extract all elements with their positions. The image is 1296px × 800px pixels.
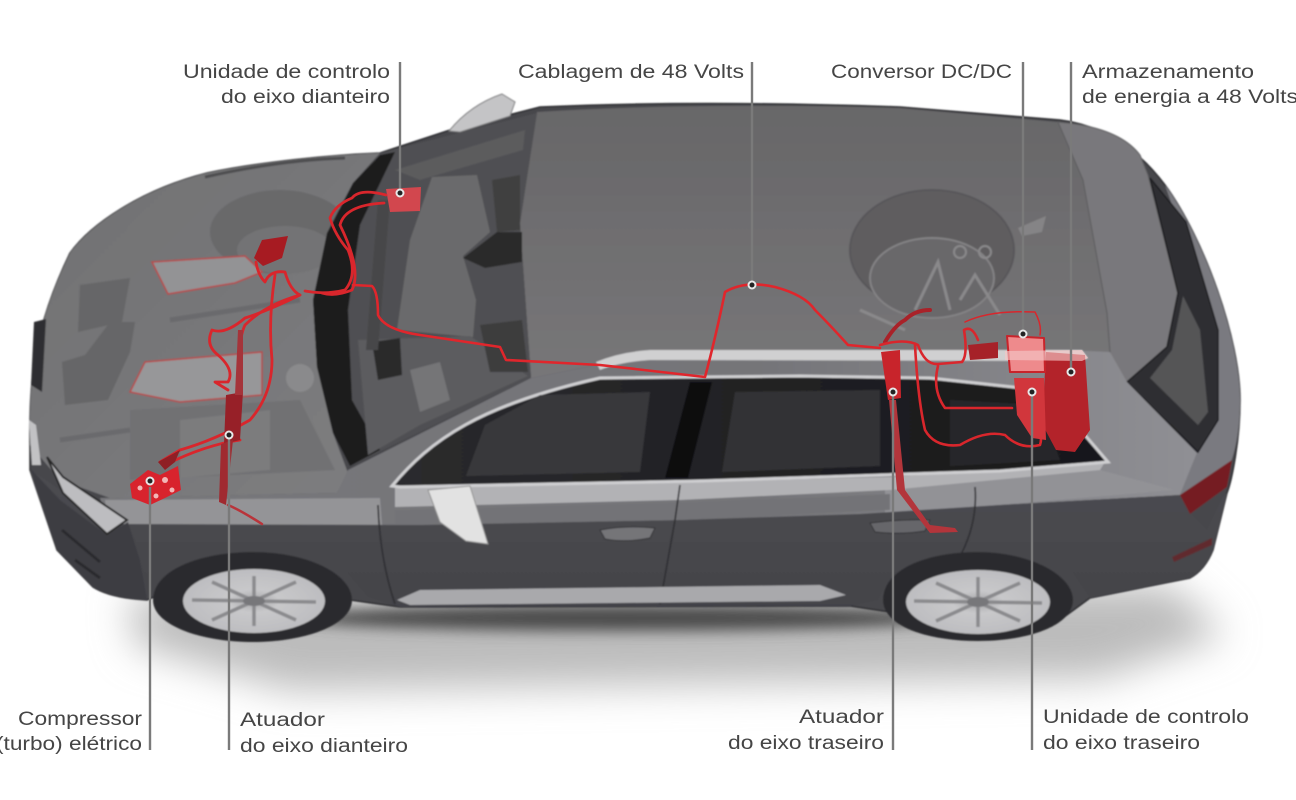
label: front axle actuator — [240, 710, 408, 757]
windshield with interior — [313, 113, 537, 466]
car illustration — [29, 94, 1240, 642]
sill trim — [397, 585, 846, 605]
side shoulder panel — [100, 351, 1197, 526]
front relay box — [254, 236, 288, 266]
main 48 volt harness — [353, 284, 880, 377]
shoulder light strips — [105, 498, 382, 526]
ground shadow — [130, 585, 1225, 690]
front grille edge — [29, 420, 41, 465]
rear window — [1127, 178, 1218, 452]
label: front control unit: do eixo dianteiro — [221, 87, 390, 108]
door handles — [600, 527, 655, 541]
headlight — [47, 457, 127, 534]
tail light — [1180, 460, 1232, 514]
leader lines — [150, 62, 1071, 750]
door details — [378, 485, 975, 604]
label: front axle actuator: Atuador — [240, 710, 326, 731]
electric compressor — [130, 450, 181, 505]
label: wiring: Cablagem de 48 Volts — [518, 62, 744, 83]
car body base — [30, 104, 1240, 620]
front bumper — [30, 468, 147, 600]
label: rear axle actuator: Atuador — [799, 707, 885, 728]
label: front control unit — [183, 62, 390, 108]
hood — [30, 153, 380, 498]
rear wheel — [883, 552, 1073, 641]
rear hatch panel — [1058, 122, 1178, 382]
label: rear control unit: Unidade de controlo — [1043, 707, 1249, 728]
roof antenna mirror — [449, 94, 515, 132]
side windows — [392, 376, 1108, 487]
label: energy storage: Armazenamento — [1082, 62, 1254, 83]
label: rear axle actuator — [728, 707, 885, 754]
label: energy storage: de energia a 48 Volts — [1082, 87, 1296, 108]
D pillar panel — [1165, 185, 1240, 495]
label: electric compressor: Compressor — [18, 709, 143, 730]
label: rear axle actuator: do eixo traseiro — [728, 733, 884, 754]
label: front control unit: Unidade de controlo — [183, 62, 390, 83]
spare wheel seen through roof — [850, 190, 1046, 330]
door mirror — [428, 486, 488, 544]
front wiring — [160, 192, 386, 524]
roof — [520, 106, 1110, 378]
rear control unit — [1014, 378, 1046, 440]
red 48 volt system — [130, 187, 1090, 533]
battery 48 volt storage — [1040, 352, 1090, 452]
label: DC/DC converter: Conversor DC/DC — [831, 62, 1012, 83]
label: electric compressor — [0, 709, 143, 755]
label: front axle actuator: do eixo dianteiro — [240, 736, 408, 757]
rail highlight over converter — [1005, 350, 1088, 361]
label: rear control unit: do eixo traseiro — [1043, 733, 1200, 754]
rear small module — [968, 342, 998, 360]
DC/DC converter — [1007, 336, 1045, 372]
roof rail — [596, 350, 1088, 370]
rear wiring — [880, 310, 1041, 446]
lower door panels — [30, 470, 1227, 607]
front control unit — [386, 187, 421, 212]
label: rear control unit — [1043, 707, 1249, 754]
rear axle actuator — [881, 350, 958, 533]
front axle actuator body — [219, 330, 243, 505]
leader markers — [146, 190, 1074, 484]
label: energy storage — [1082, 62, 1296, 108]
engine bay details — [60, 190, 350, 480]
window sill trim — [395, 462, 1105, 507]
front wheel — [153, 552, 352, 642]
